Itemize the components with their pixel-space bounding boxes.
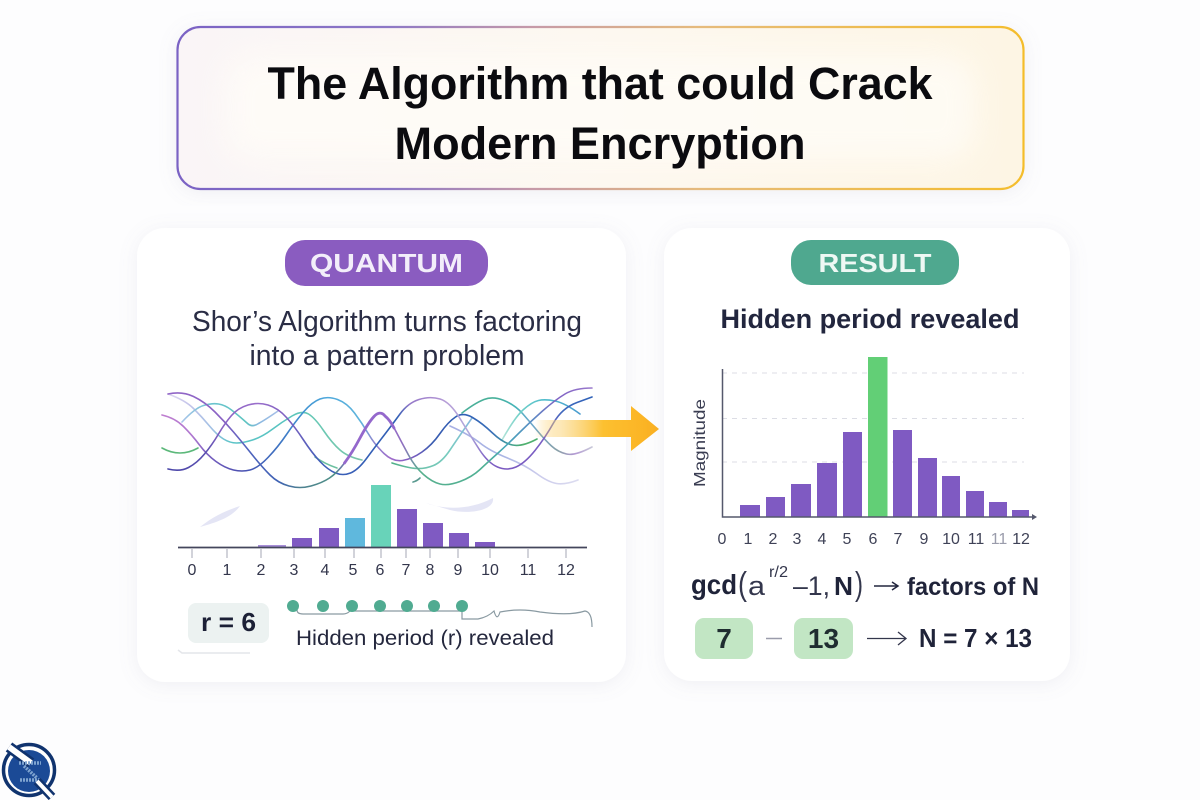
period dots sequence (287, 600, 592, 627)
formula: gcd: –1, (793, 571, 830, 601)
logo (4, 744, 54, 797)
axis labels: 9 (454, 562, 463, 579)
axis labels: 7 (402, 562, 411, 579)
title banner (178, 27, 1024, 189)
formula: gcd: N (834, 571, 853, 601)
x axis labels: 0 (718, 531, 727, 548)
title: The Algorithm that could Crack (268, 58, 933, 109)
x axis labels: 11 (968, 531, 984, 548)
axis labels (188, 562, 575, 579)
chart: period bars (178, 485, 587, 579)
x axis labels: 1 (744, 531, 753, 548)
x axis labels: 7 (894, 531, 903, 548)
badge: result (791, 240, 959, 285)
x axis labels: 11 (991, 531, 1007, 548)
x axis labels: 5 (843, 531, 852, 548)
formula: gcd: factors of N (907, 573, 1039, 601)
axis (178, 546, 587, 548)
x axis labels: 6 (869, 531, 878, 548)
axis labels: 12 (557, 562, 575, 579)
axis labels: 11 (520, 562, 536, 579)
heading: quantum: into a pattern problem (250, 340, 524, 372)
x axis labels (718, 531, 1030, 548)
y axis label: Magnitude (692, 399, 709, 487)
chart: interfering quantum waves (162, 388, 592, 488)
factor chip: 13: 13 (808, 623, 839, 654)
heading: quantum: Shor’s Algorithm turns factoring (192, 306, 582, 338)
r equals 6 chip: r = 6 (201, 607, 256, 637)
panel: quantum (137, 228, 659, 682)
axis labels: 0 (188, 562, 197, 579)
x axis labels: 2 (769, 531, 778, 548)
axis labels: 5 (349, 562, 358, 579)
formula: gcd: r/2 (769, 564, 788, 581)
title: Modern Encryption (394, 118, 806, 169)
r equals 6 chip (188, 603, 269, 643)
x axis labels: 9 (920, 531, 929, 548)
formula: gcd: a (748, 571, 766, 601)
factor chip: 7 (695, 618, 753, 659)
x axis labels: 10 (942, 531, 960, 548)
axis labels: 8 (426, 562, 435, 579)
axis labels: 6 (376, 562, 385, 579)
formula: gcd: ) (855, 565, 863, 602)
bars (258, 485, 495, 547)
formula: gcd (691, 564, 1039, 602)
formula: gcd: gcd (691, 569, 737, 600)
arrow: quantum to result (535, 406, 659, 451)
factor chip: 7: 7 (716, 623, 732, 654)
bars (740, 357, 1029, 517)
equation: N = 7 x 13: N = 7 × 13 (919, 623, 1032, 653)
faint underline mark (178, 650, 250, 653)
badge: result: RESULT (818, 248, 932, 278)
arrow: factors to product (867, 632, 906, 645)
factor chip: 13 (794, 618, 853, 659)
smudge marks (200, 498, 493, 527)
axes (722, 369, 1034, 517)
axis labels: 10 (481, 562, 499, 579)
badge: quantum (285, 240, 488, 286)
badge: quantum: QUANTUM (310, 248, 463, 278)
axis labels: 1 (223, 562, 232, 579)
caption: hidden period: Hidden period (r) revealed (296, 627, 554, 650)
x axis labels: 3 (793, 531, 802, 548)
formula: gcd: ( (738, 565, 747, 602)
dash (766, 638, 782, 640)
chart: magnitude bars (692, 357, 1037, 548)
x axis labels: 4 (818, 531, 827, 548)
axis labels: 4 (321, 562, 330, 579)
x axis labels: 12 (1012, 531, 1030, 548)
axis labels: 3 (290, 562, 299, 579)
axis labels: 2 (257, 562, 266, 579)
heading: result: Hidden period revealed (720, 304, 1020, 334)
panel: result (664, 228, 1070, 681)
